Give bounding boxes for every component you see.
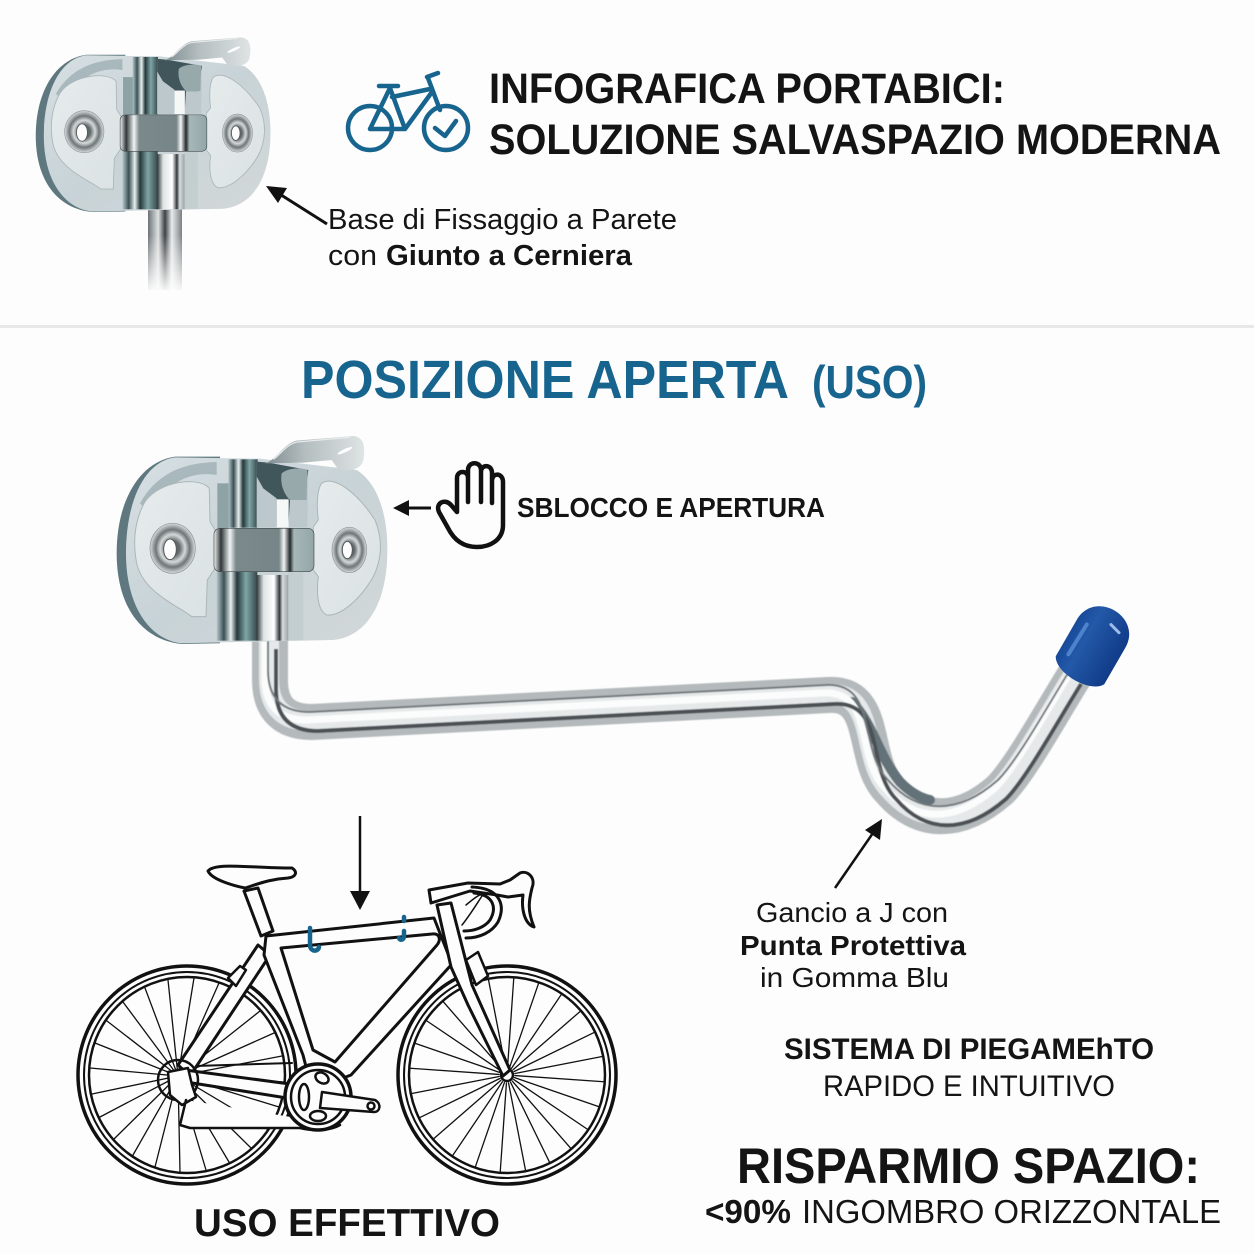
arrow: down to bike frame: [350, 816, 370, 910]
caption: wall base: Base di Fissaggio a Parete: [328, 204, 677, 236]
blue rubber tip: [1050, 596, 1139, 694]
photo: rack arm with J hook and blue tip: [265, 596, 1139, 825]
arrow: unlock direction: [393, 500, 431, 516]
photo: open hinge plate: [117, 436, 387, 644]
caption: J hook: Gancio a J con: [756, 897, 948, 928]
arrow: to wall base: [266, 186, 327, 224]
caption: J hook: [740, 897, 967, 993]
illustration: road bike on hooks: [78, 866, 616, 1184]
caption: J hook: in Gomma Blu: [760, 962, 949, 993]
divider: [0, 325, 1254, 328]
caption: wall base: Giunto a Cerniera: [386, 240, 633, 272]
photo: wall mounting base with hinge: [36, 37, 270, 293]
text: folding system: RAPIDO E INTUITIVO: [823, 1070, 1115, 1103]
label: actual use: USO EFFETTIVO: [194, 1202, 500, 1245]
handlebar: [429, 872, 534, 938]
upper chain: [195, 1063, 292, 1066]
brakes: [228, 952, 488, 986]
caption: J hook: Punta Protettiva: [740, 930, 967, 961]
front wheel: [398, 966, 616, 1184]
heading: open position: (USO): [812, 356, 927, 408]
frame: [178, 888, 510, 1098]
heading: open position: POSIZIONE APERTA: [301, 350, 789, 410]
icon: hand: [438, 463, 503, 547]
text: space saving: INGOMBRO ORIZZONTALE: [802, 1193, 1221, 1230]
caption: wall base: [328, 204, 677, 272]
icon: blue hooks on top tube: [310, 917, 404, 951]
text: folding system: SISTEMA DI PIEGAMEhTO: [784, 1033, 1154, 1066]
arrow: to J hook: [835, 819, 882, 888]
title: INFOGRAFICA PORTABICI:: [489, 65, 1005, 113]
text: folding system: [784, 1033, 1154, 1103]
saddle: [208, 866, 295, 888]
title: [489, 65, 1221, 164]
drivetrain: [158, 1060, 379, 1130]
text: space saving: RISPARMIO SPAZIO:: [737, 1138, 1200, 1194]
icon: bicycle with check mark: [348, 73, 468, 150]
label: unlock and open: SBLOCCO E APERTURA: [517, 492, 825, 523]
rear wheel: [78, 966, 296, 1184]
text: space saving: [705, 1138, 1221, 1230]
caption: wall base: con: [328, 240, 377, 272]
text: space saving: <90%: [705, 1193, 791, 1230]
